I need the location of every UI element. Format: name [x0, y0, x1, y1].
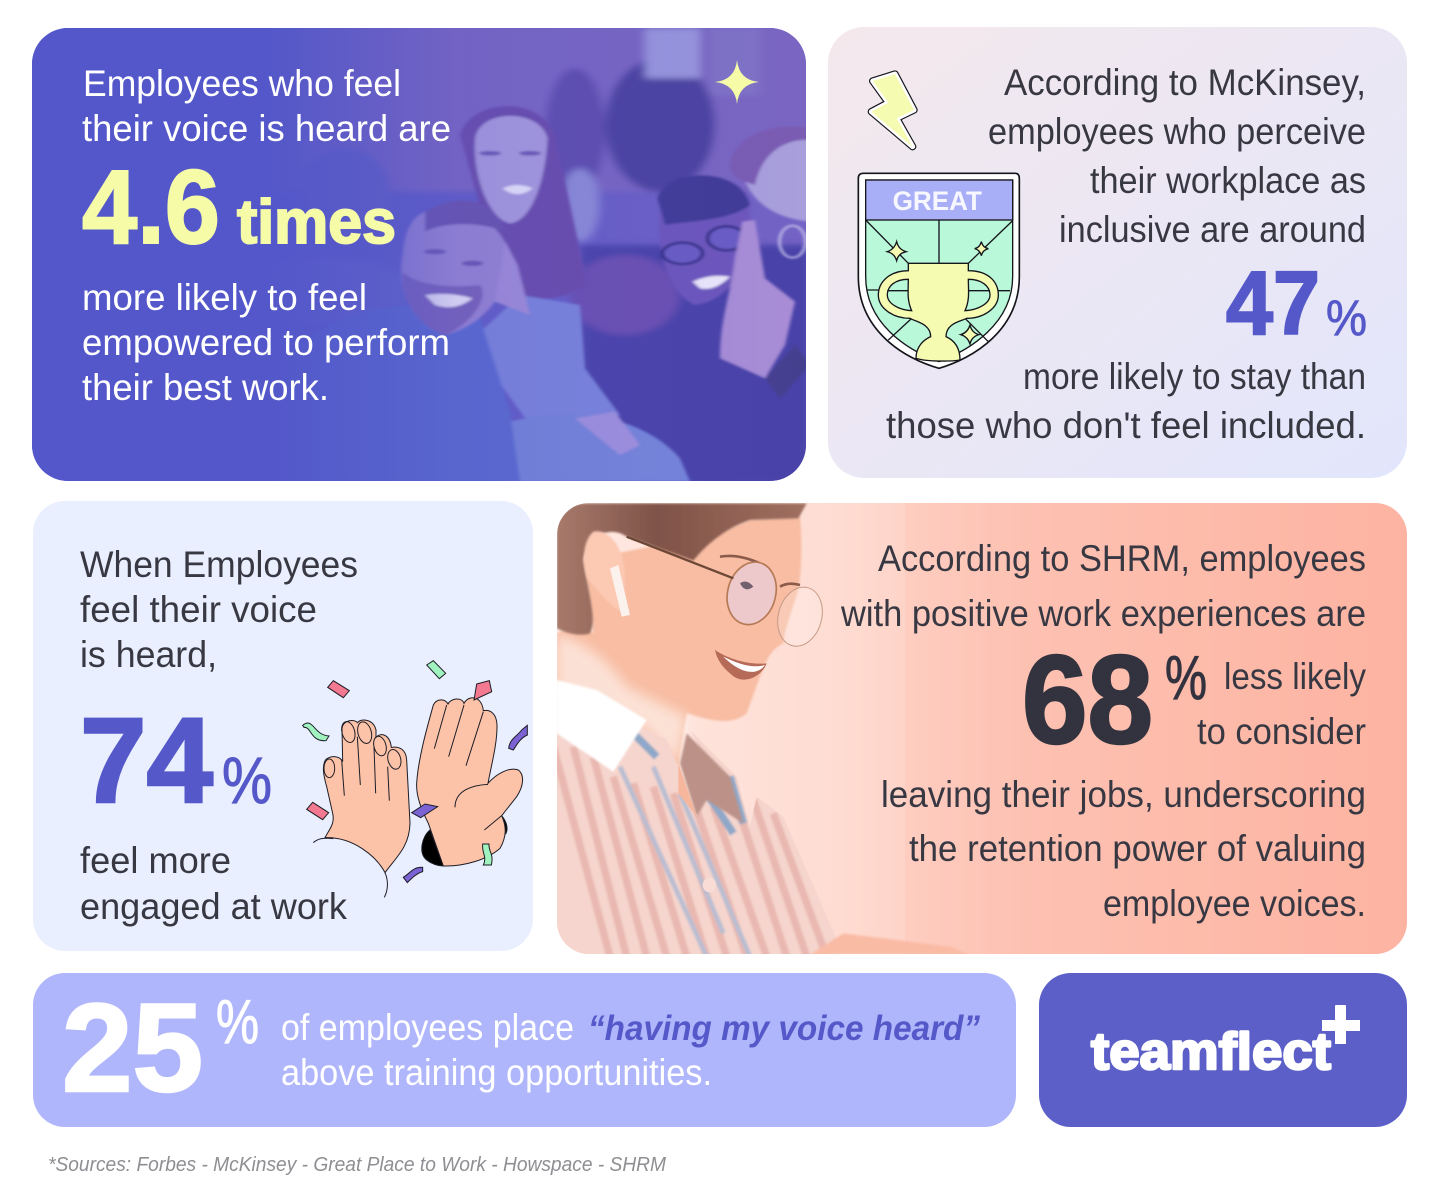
shirt: [557, 727, 843, 955]
SHRM text: According to SHRM, employees: [878, 538, 1366, 579]
icon: high five with confetti: [303, 661, 527, 897]
stat: 68%: %: [1165, 644, 1207, 713]
stat: 4.6 times: 4.6: [82, 149, 220, 266]
panel: voice heard 4.6 times: [32, 25, 810, 485]
panel: SHRM retention: [553, 503, 1407, 957]
closing text: more likely to feel: [82, 277, 367, 318]
SHRM text: [840, 538, 1366, 634]
intro text: their voice is heard are: [82, 108, 451, 149]
closing text: feel more: [80, 840, 231, 881]
lead text: feel their voice: [80, 589, 317, 630]
stat: 4.6 times: times: [237, 188, 396, 257]
closing text: their best work.: [82, 367, 329, 408]
ear: [584, 531, 625, 613]
closing text: [82, 277, 450, 408]
McKinsey closing text: those who don't feel included.: [886, 405, 1366, 446]
panel: 25% training: [33, 973, 1016, 1127]
panel: teamflect logo: [1039, 973, 1407, 1127]
stat: 47%: %: [1326, 290, 1367, 346]
McKinsey text: employees who perceive: [988, 111, 1366, 152]
stat: 25%: 25: [62, 979, 203, 1118]
glow on neck: [557, 633, 687, 763]
McKinsey text: inclusive are around: [1059, 209, 1366, 250]
SHRM text: with positive work experiences are: [840, 593, 1366, 634]
stat: 4.6 times: [82, 149, 396, 266]
icon: trophy badge: GREAT: [893, 186, 982, 216]
photo: woman with glasses: [553, 503, 970, 957]
SHRM closing text: the retention power of valuing: [909, 828, 1366, 869]
SHRM middle text: to consider: [1197, 711, 1366, 752]
sources footnote: *Sources: Forbes - McKinsey - Great Place to Work - Howspace - SHRM: [48, 1154, 666, 1176]
lead text: [80, 544, 358, 675]
stat: 74%: 74: [80, 692, 213, 828]
icon: lightning bolt: [871, 74, 914, 147]
SHRM middle text: less likely: [1224, 656, 1366, 697]
statement text: above training opportunities.: [281, 1052, 712, 1093]
group photo: [32, 25, 810, 485]
SHRM closing text: employee voices.: [1103, 883, 1366, 924]
intro text: Employees who feel: [83, 63, 401, 104]
McKinsey text: [988, 62, 1366, 250]
panel: McKinsey inclusion: [828, 27, 1407, 478]
panel: engaged at work: [33, 501, 533, 951]
McKinsey closing text: more likely to stay than: [1023, 356, 1366, 397]
hair: [557, 503, 807, 635]
stat: 68%: 68: [1022, 631, 1153, 770]
statement text: of employees place: [281, 1007, 574, 1048]
SHRM closing text: [881, 774, 1366, 924]
SHRM middle text: [1197, 656, 1366, 752]
logo plus: [1322, 1005, 1360, 1044]
statement text: [281, 1007, 980, 1093]
stat: 47%: 47: [1226, 254, 1320, 354]
intro text: [82, 63, 451, 149]
statement text: “having my voice heard”: [588, 1009, 980, 1048]
McKinsey text: According to McKinsey,: [1004, 62, 1366, 103]
SHRM closing text: leaving their jobs, underscoring: [881, 774, 1366, 815]
icon: trophy badge: [858, 173, 1019, 368]
lead text: is heard,: [80, 634, 217, 675]
closing text: empowered to perform: [82, 322, 450, 363]
McKinsey text: their workplace as: [1090, 160, 1366, 201]
lead text: When Employees: [80, 544, 358, 585]
icon: sparkle: [715, 60, 759, 104]
skin base: [557, 517, 801, 767]
stat: 25%: %: [216, 988, 259, 1057]
closing text: [80, 840, 347, 927]
logo wordmark: teamflect: [1091, 1023, 1331, 1081]
McKinsey closing text: [886, 356, 1366, 446]
closing text: engaged at work: [80, 886, 347, 927]
stat: 74%: %: [222, 743, 272, 817]
